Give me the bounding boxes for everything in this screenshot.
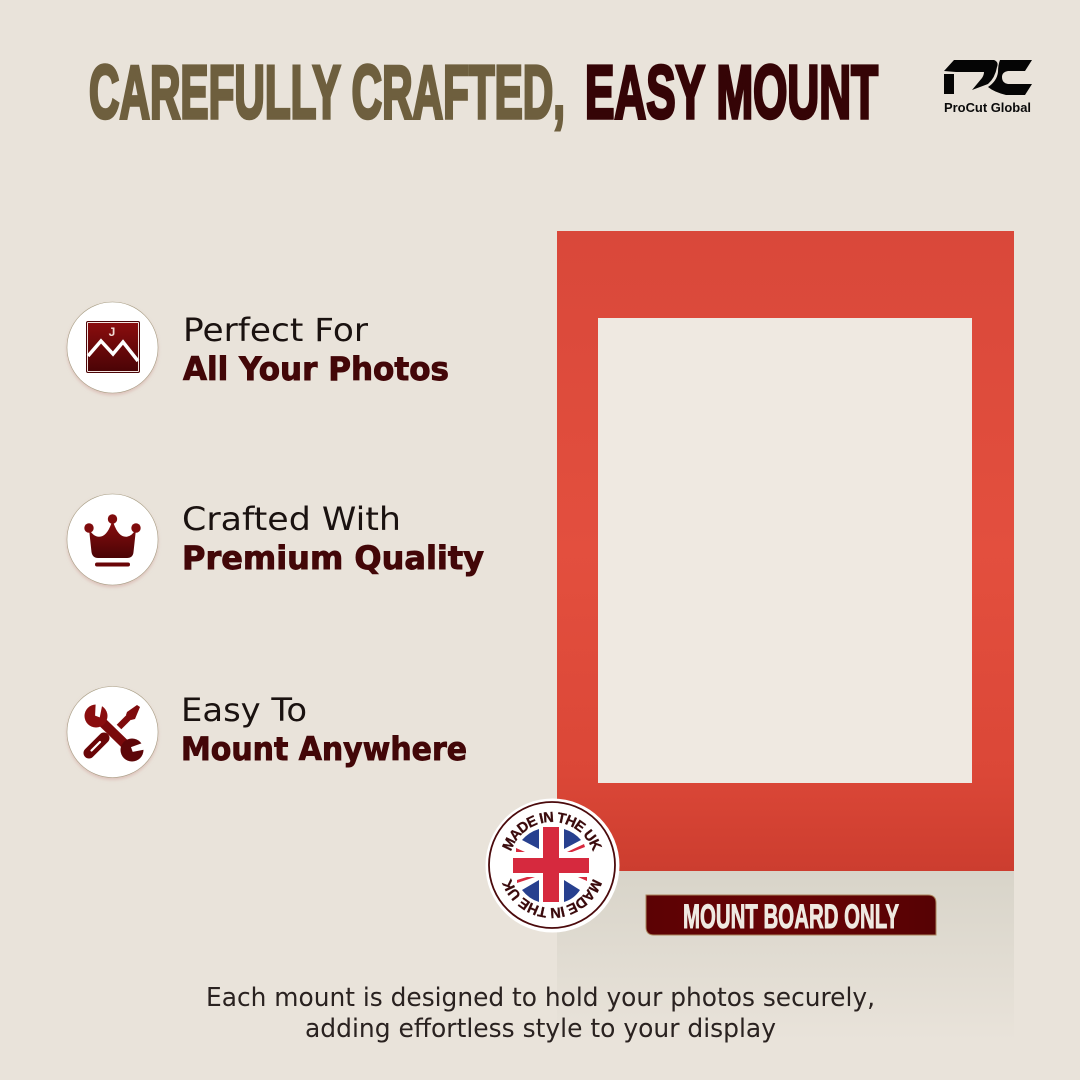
board shadow <box>557 871 1014 1041</box>
feature text 1 <box>183 311 449 388</box>
icon: wrench and screwdriver <box>67 686 158 778</box>
label: mount board only: MOUNT BOARD ONLY <box>683 898 899 936</box>
title: CAREFULLY CRAFTED, <box>89 50 565 134</box>
caption <box>206 983 875 1044</box>
panel: product mount board <box>557 231 1014 1041</box>
feature 2: premium quality <box>67 494 484 585</box>
badge text: MADE IN THE UK <box>502 878 602 918</box>
feature text 1: Perfect For <box>183 311 369 349</box>
caption: adding effortless style to your display <box>305 1014 776 1044</box>
feature text 2: Crafted With <box>182 500 401 538</box>
icon: photo <box>67 302 158 393</box>
screwdriver <box>89 705 140 753</box>
mount aperture <box>598 318 972 783</box>
badge text: MADE IN THE UK <box>502 812 602 852</box>
wrench <box>84 702 146 762</box>
red mount frame <box>557 231 1014 871</box>
feature text 3: Mount Anywhere <box>181 730 467 768</box>
icon: photo: J <box>109 325 115 339</box>
badge: made in the UK <box>486 798 620 932</box>
feature 1: all your photos <box>67 302 449 393</box>
badge text <box>502 812 602 918</box>
feature 3: mount anywhere <box>67 686 467 778</box>
icon: union flag <box>513 827 589 902</box>
icon: crown <box>67 494 158 585</box>
feature text 1: All Your Photos <box>183 350 449 388</box>
logo: ProCut Global: ProCut Global <box>944 101 1031 115</box>
feature text 3: Easy To <box>181 691 307 729</box>
feature text 3 <box>181 691 467 768</box>
feature text 2: Premium Quality <box>182 539 484 577</box>
caption: Each mount is designed to hold your photos securely, <box>206 983 875 1013</box>
title: EASY MOUNT <box>585 50 878 134</box>
label: mount board only <box>646 895 936 936</box>
feature text 2 <box>182 500 484 577</box>
logo: ProCut Global <box>944 60 1032 115</box>
